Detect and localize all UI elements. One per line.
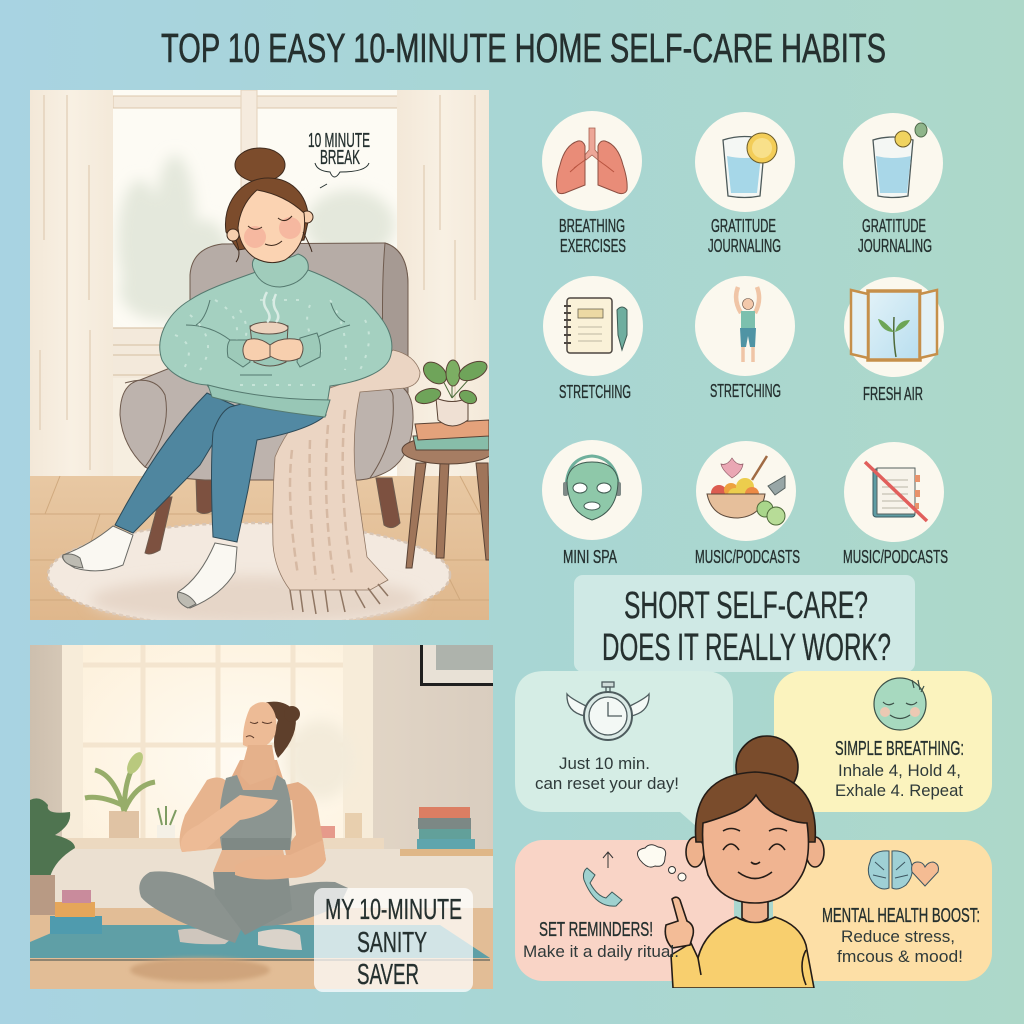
- blanket: [273, 350, 420, 614]
- icon: winged stopwatch: [567, 682, 649, 740]
- habit: music/podcasts, fruit bowl: [695, 441, 800, 567]
- bubble: just 10 minutes: can reset your day!: [535, 775, 679, 793]
- habit: stretching, notebook and pen: STRETCHING: [559, 382, 631, 402]
- speech note: 10 minute break: BREAK: [320, 147, 360, 169]
- habit: fresh air, open window with sprout: [844, 277, 944, 404]
- habit: breathing exercises: EXERCISES: [560, 236, 626, 256]
- habit: breathing exercises: BREATHING: [559, 216, 625, 236]
- sweater: [160, 254, 392, 417]
- habit: stretching, notebook and pen: [543, 276, 643, 402]
- habit: gratitude journaling, water with leaf: JOURNALING: [858, 236, 932, 256]
- habit: gratitude journaling, water with lemon: [695, 112, 795, 256]
- woman in yoga pose: [139, 702, 348, 950]
- habit: gratitude journaling, water with leaf: [843, 113, 943, 256]
- panel: photo of woman breathing on yoga mat: [30, 640, 493, 992]
- bubble: just 10 minutes: [515, 671, 733, 827]
- curtains: [30, 90, 489, 478]
- caption card: my 10-minute sanity saver: MY 10-MINUTE: [325, 894, 462, 926]
- habit: music/podcasts, crossed-out notebook: [843, 442, 948, 567]
- icon: brain and heart: [868, 851, 938, 889]
- habit: breathing exercises: [542, 111, 642, 256]
- speech note: 10 minute break: [308, 130, 370, 188]
- window: [30, 645, 493, 909]
- icon: phone with arrow: [583, 852, 622, 906]
- callout: short self-care question: SHORT SELF-CARE?: [624, 585, 868, 627]
- caption card: my 10-minute sanity saver: SAVER: [357, 959, 419, 991]
- habit: gratitude journaling, water with lemon: JOURNALING: [708, 236, 781, 256]
- bubble: mental health boost: Reduce stress,: [841, 928, 955, 946]
- floor and mat: [30, 908, 493, 989]
- window with blurred trees: [113, 90, 403, 480]
- bubble: just 10 minutes: Just 10 min.: [559, 755, 650, 773]
- bubble: mental health boost: [773, 840, 992, 981]
- bubble: set reminders: SET REMINDERS!: [539, 919, 653, 941]
- bubble: simple breathing: [774, 671, 992, 812]
- habit: fresh air, open window with sprout: FRESH AIR: [863, 384, 923, 404]
- bubble: simple breathing: Inhale 4, Hold 4,: [838, 762, 961, 780]
- thought cloud: [637, 845, 686, 881]
- caption card: my 10-minute sanity saver: [314, 888, 473, 992]
- habit: gratitude journaling, water with leaf: GRATITUDE: [862, 216, 926, 236]
- habit: gratitude journaling, water with lemon: GRATITUDE: [711, 216, 776, 236]
- bubble: mental health boost: fmcous & mood!: [837, 948, 963, 966]
- habit: mini spa, face mask: [542, 440, 642, 567]
- panel: cozy illustration of woman in armchair: [30, 90, 494, 627]
- socks: [62, 526, 237, 608]
- habit: stretching, raised arms figure: [695, 276, 795, 401]
- habit icon grid: [542, 111, 948, 567]
- wall shelf with blocks: [400, 807, 493, 856]
- armchair: [120, 243, 413, 554]
- mug and hands: [243, 292, 303, 366]
- trousers: [115, 393, 326, 542]
- plants and props: [30, 750, 362, 934]
- woman's head with bun: [225, 148, 313, 263]
- floor: [30, 476, 489, 620]
- rug: [48, 523, 450, 627]
- habit: mini spa, face mask: MINI SPA: [563, 547, 617, 567]
- framed picture: [420, 645, 493, 686]
- icon: calm face: [874, 678, 926, 730]
- bubble: simple breathing: Exhale 4. Repeat: [835, 782, 963, 800]
- habit: music/podcasts, fruit bowl: MUSIC/PODCASTS: [695, 547, 800, 567]
- caption card: my 10-minute sanity saver: SANITY: [357, 927, 427, 959]
- character: smiling woman pointing up: [637, 736, 824, 988]
- habit: music/podcasts, crossed-out notebook: MUSIC/PODCASTS: [843, 547, 948, 567]
- callout: short self-care question: [574, 575, 915, 672]
- text: make it a daily ritual: Make it a daily ritual.: [523, 943, 679, 961]
- habit: stretching, raised arms figure: STRETCHING: [710, 381, 781, 401]
- side table with books and plant: [402, 357, 494, 568]
- speech note: 10 minute break: 10 MINUTE: [308, 130, 370, 152]
- bubble: set reminders: [515, 840, 734, 981]
